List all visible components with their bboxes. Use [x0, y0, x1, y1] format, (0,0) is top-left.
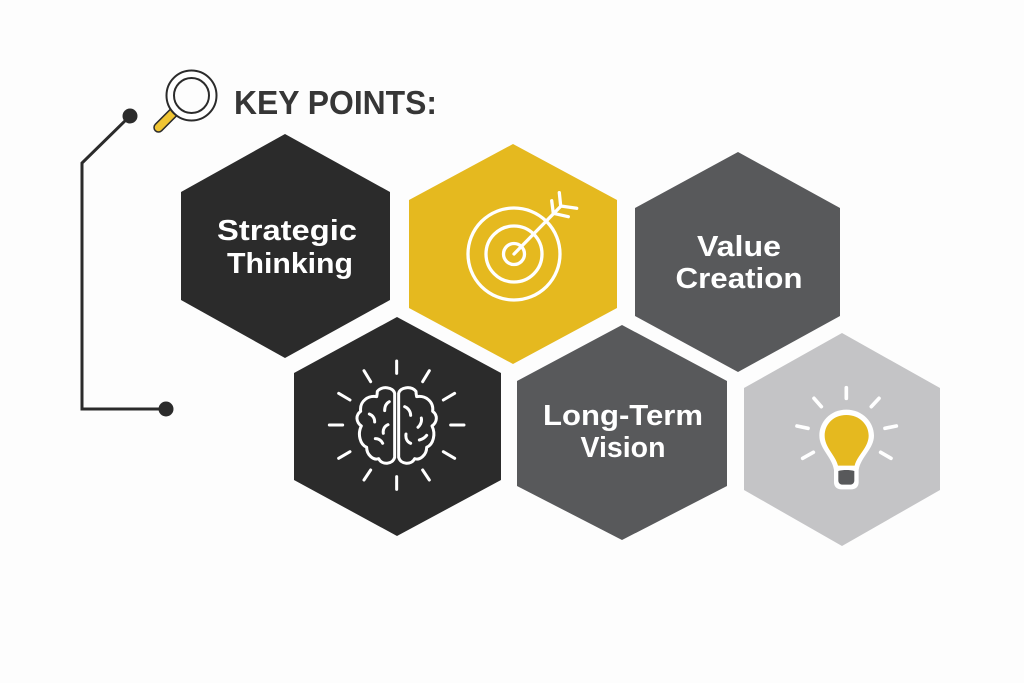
panel: light bulb — [744, 333, 940, 546]
label: Strategic Thinking — [217, 215, 357, 280]
icon: light bulb — [797, 388, 896, 489]
label: Strategic Thinking: Thinking — [227, 248, 353, 280]
panel: target — [409, 144, 617, 364]
connector bracket — [82, 108, 174, 416]
label: Value Creation: Value — [697, 231, 781, 263]
label: Strategic Thinking: Strategic — [217, 215, 357, 247]
panel: brain — [294, 317, 501, 536]
icon: brain with rays — [329, 361, 464, 489]
panel: Strategic Thinking — [181, 134, 390, 358]
label: Long-Term Vision: Vision — [580, 432, 666, 464]
panel: Value Creation — [635, 152, 840, 372]
icon: magnifying glass — [158, 70, 216, 128]
heading: KEY POINTS: — [234, 84, 437, 121]
label: Long-Term Vision — [543, 400, 703, 464]
icon: target with arrow — [468, 193, 577, 300]
panel: Long-Term Vision — [517, 325, 727, 540]
label: Long-Term Vision: Long-Term — [543, 400, 703, 432]
label: Value Creation: Creation — [676, 263, 802, 295]
label: Value Creation — [676, 231, 802, 295]
